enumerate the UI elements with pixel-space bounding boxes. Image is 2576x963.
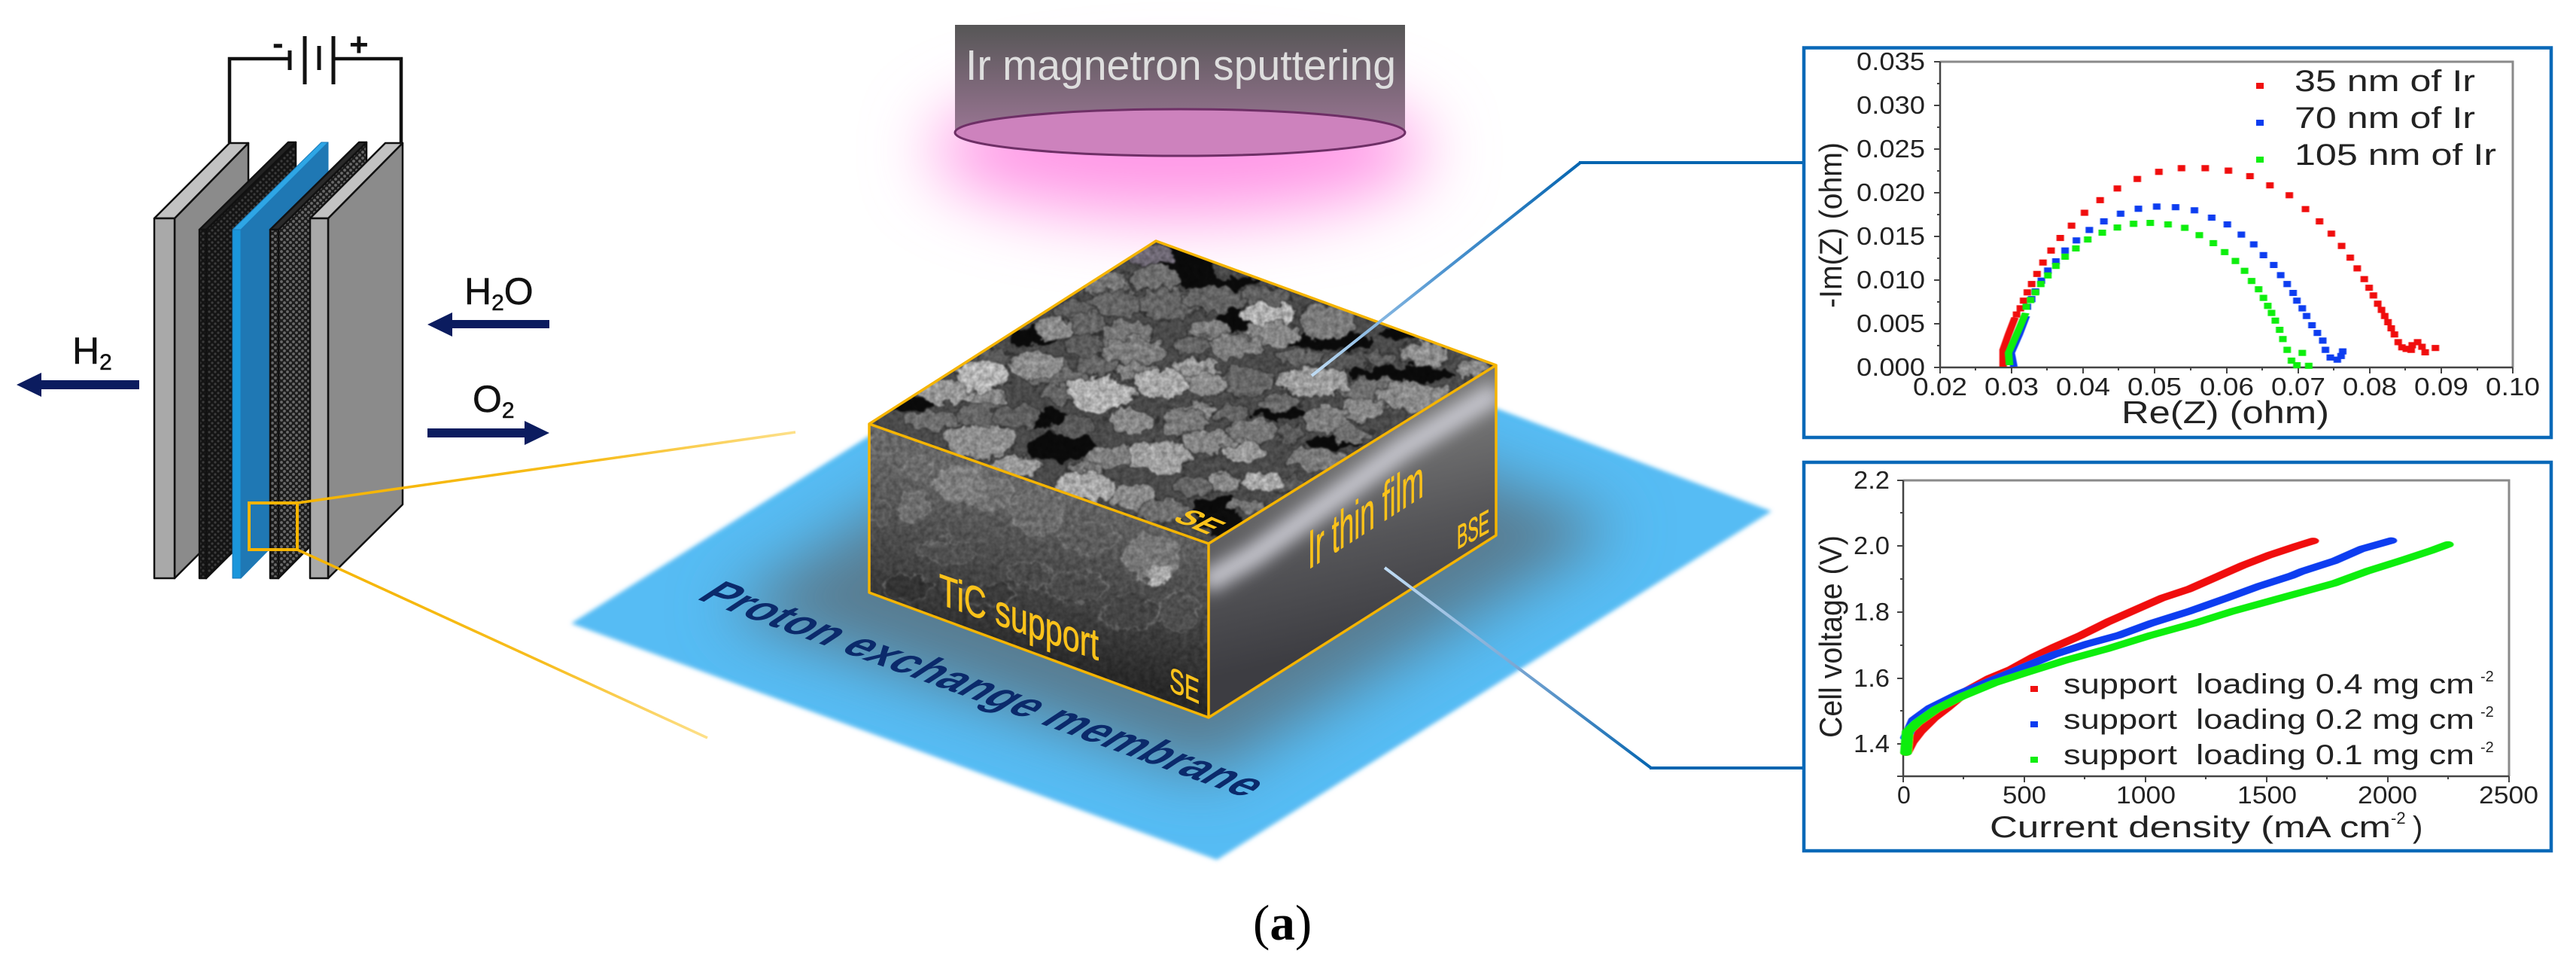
panel: polarization chart bbox=[1804, 462, 2551, 851]
arrow: H2 out: 2 bbox=[99, 350, 112, 375]
left catalyst layer bbox=[199, 142, 296, 578]
legend bbox=[2256, 65, 2496, 172]
sputtering target cylinder: Ir magnetron sputtering bbox=[966, 41, 1396, 90]
x axis tick labels: 0.06 bbox=[2200, 373, 2254, 401]
right end plate bbox=[310, 143, 403, 578]
x axis tick labels: 2500 bbox=[2479, 782, 2538, 809]
figure label: (a) bbox=[1253, 895, 1312, 951]
x axis title bbox=[1990, 809, 2422, 844]
x axis tick labels: 0 bbox=[1897, 782, 1911, 809]
proton exchange membrane sheet: Proton exchange membrane bbox=[687, 574, 1282, 803]
arrow: H2O in: H bbox=[464, 270, 491, 312]
top face: Ir film surface SEM bbox=[872, 242, 1493, 542]
cube of electrode SEM images bbox=[868, 239, 1498, 719]
y axis tick labels: 0.010 bbox=[1857, 266, 1925, 294]
series: 35 nm (red) bbox=[2003, 165, 2435, 367]
legend: 35 nm of Ir bbox=[2295, 65, 2475, 98]
legend: -2 bbox=[2480, 739, 2494, 756]
cube edges bbox=[869, 241, 1496, 718]
arrow: O2 out: O bbox=[473, 378, 502, 420]
cube of electrode SEM images: BSE bbox=[1457, 502, 1489, 557]
right face: Ir thin film BSE bbox=[1204, 365, 1498, 718]
y axis title: -Im(Z) (ohm) bbox=[1813, 142, 1848, 308]
zoom lines from cell to cube bbox=[249, 432, 795, 738]
series: 105 nm (green) bbox=[2009, 220, 2309, 369]
x axis tick labels: 500 bbox=[2003, 782, 2046, 809]
sputtering glow bbox=[931, 84, 1428, 217]
legend bbox=[2030, 669, 2494, 770]
leader line to impedance chart bbox=[1312, 163, 1805, 376]
sputtering target cylinder bbox=[955, 25, 1405, 156]
x axis tick labels: 0.10 bbox=[2486, 373, 2540, 401]
arrow: O2 out: 2 bbox=[502, 398, 515, 423]
arrow: H2O in bbox=[427, 270, 549, 337]
y axis tick labels: 0.020 bbox=[1857, 178, 1925, 206]
electrolyser cell stack bbox=[154, 142, 403, 578]
label: SE top: SE bbox=[1165, 505, 1234, 538]
x axis tick labels: 0.04 bbox=[2056, 373, 2110, 401]
legend: 105 nm of Ir bbox=[2295, 139, 2496, 172]
y axis tick labels bbox=[1857, 47, 1925, 381]
x axis tick labels: 2000 bbox=[2358, 782, 2417, 809]
y axis tick labels: 0.025 bbox=[1857, 135, 1925, 163]
y axis tick labels: 2.0 bbox=[1854, 532, 1890, 559]
arrow: H2O in: 2 bbox=[491, 291, 504, 315]
leader line to polarization chart bbox=[1385, 568, 1805, 768]
x axis tick labels bbox=[1897, 782, 2538, 809]
legend: 70 nm of Ir bbox=[2295, 102, 2475, 135]
battery circuit: + bbox=[349, 26, 369, 63]
y axis tick labels: 0.035 bbox=[1857, 47, 1925, 75]
x axis tick labels: 0.09 bbox=[2414, 373, 2468, 401]
battery circuit bbox=[230, 25, 401, 143]
cube of electrode SEM images: Ir thin film bbox=[1308, 446, 1424, 581]
y axis tick labels: 0.015 bbox=[1857, 222, 1925, 250]
x axis title: -2 bbox=[2391, 809, 2406, 827]
x axis tick labels: 1000 bbox=[2116, 782, 2176, 809]
x axis tick labels: 0.03 bbox=[1984, 373, 2039, 401]
series: 70 nm (blue) bbox=[2011, 203, 2343, 367]
x axis tick labels: 0.08 bbox=[2343, 373, 2397, 401]
arrow: H2O in: O bbox=[504, 270, 534, 312]
label: SE front: SE bbox=[1169, 660, 1200, 712]
x axis title: Re(Z) (ohm) bbox=[2121, 395, 2329, 430]
x axis tick labels bbox=[1913, 373, 2540, 401]
y axis tick labels: 0.030 bbox=[1857, 91, 1925, 119]
x axis title: Current density (mA cm bbox=[1990, 811, 2391, 844]
legend: -2 bbox=[2480, 704, 2494, 721]
legend: support loading 0.4 mg cm bbox=[2064, 669, 2474, 699]
x axis tick labels: 0.02 bbox=[1913, 373, 1967, 401]
blue membrane sheet bbox=[233, 142, 328, 578]
left face: TiC support SEM bbox=[870, 426, 1207, 715]
y axis tick labels: 1.6 bbox=[1854, 664, 1890, 692]
x axis tick labels: 1500 bbox=[2237, 782, 2297, 809]
legend: support loading 0.1 mg cm bbox=[2064, 739, 2474, 770]
arrow: H2 out: H bbox=[72, 330, 99, 372]
plot axes bbox=[1934, 62, 2513, 373]
battery circuit: - bbox=[272, 25, 284, 62]
series: polarization curves bbox=[1906, 541, 2448, 753]
y axis tick labels: 1.4 bbox=[1854, 730, 1890, 757]
y axis tick labels: 0.005 bbox=[1857, 309, 1925, 337]
y axis tick labels bbox=[1854, 466, 1890, 757]
right catalyst layer bbox=[270, 142, 366, 578]
left end plate bbox=[154, 143, 248, 578]
label: TiC support: TiC support bbox=[939, 565, 1099, 670]
x axis title: ) bbox=[2413, 811, 2422, 844]
proton exchange membrane sheet bbox=[570, 405, 1773, 863]
x axis tick labels: 0.05 bbox=[2127, 373, 2182, 401]
plot axes bbox=[1897, 480, 2509, 782]
legend: -2 bbox=[2480, 669, 2494, 685]
y axis tick labels: 0.000 bbox=[1857, 353, 1925, 381]
y axis title: Cell voltage (V) bbox=[1813, 535, 1848, 738]
x axis tick labels: 0.07 bbox=[2271, 373, 2325, 401]
panel: impedance Nyquist chart bbox=[1804, 47, 2551, 437]
y axis tick labels: 1.8 bbox=[1854, 598, 1890, 626]
y axis tick labels: 2.2 bbox=[1854, 466, 1890, 494]
legend: support loading 0.2 mg cm bbox=[2064, 704, 2474, 735]
arrow: H2 out bbox=[17, 330, 139, 397]
arrow: O2 out bbox=[427, 378, 549, 445]
